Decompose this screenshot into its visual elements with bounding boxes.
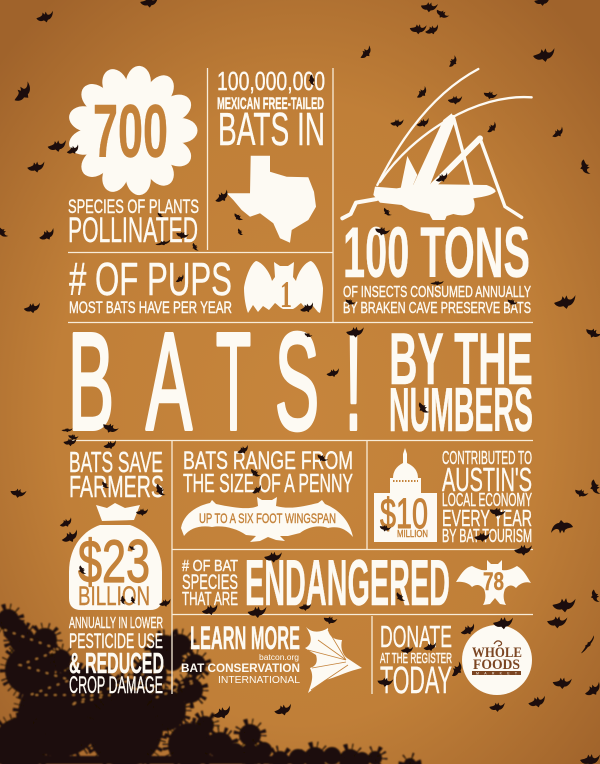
text: by bat tourism: BY BAT TOURISM — [442, 526, 532, 546]
icon: flower with 700 — [66, 64, 198, 197]
panel: endangered species — [182, 546, 531, 619]
icon: wide bat with wingspan label — [181, 497, 353, 542]
text: pesticide use: PESTICIDE USE — [69, 630, 163, 653]
panel: plants pollinated — [66, 64, 199, 250]
icon: money bag with $23 billion: BILLION — [78, 581, 150, 611]
icon: Whole Foods Market logo: WHOLE — [472, 645, 522, 661]
icon: bat with 78 — [456, 560, 531, 605]
icon: money bag with $23 billion — [69, 503, 162, 611]
title: Bats! by the numbers: ! — [345, 305, 362, 459]
text: # of bat: # OF BAT — [182, 558, 238, 575]
text: bats save: BATS SAVE — [69, 447, 163, 479]
panel: number of pups — [69, 253, 323, 317]
icon: Whole Foods Market logo — [462, 625, 532, 695]
text: species: SPECIES — [182, 571, 238, 594]
panel: bats in Texas — [217, 66, 325, 243]
icon: Whole Foods Market logo: FOODS — [473, 657, 520, 673]
text: crop damage: CROP DAMAGE — [69, 672, 163, 699]
icon: bat with 78: 78 — [483, 568, 504, 596]
text: # of pups: # OF PUPS — [69, 253, 232, 305]
heading: Bats! — [68, 305, 362, 459]
icon: capitol with $10 million: MILLION — [397, 529, 428, 540]
icon: capitol with $10 million — [374, 448, 437, 542]
text: batcon.org: batcon.org — [259, 653, 299, 662]
text: annually in lower: ANNUALLY IN LOWER — [69, 615, 163, 632]
icon: bat with 1: 1 — [280, 274, 292, 316]
text: the size of a penny: THE SIZE OF A PENNY — [183, 468, 353, 498]
heading: Bats!: S — [275, 305, 319, 459]
icon: Texas map — [227, 156, 316, 243]
text: that are: THAT ARE — [182, 589, 238, 609]
text: farmers: FARMERS — [69, 469, 164, 504]
icon: Whole Foods Market logo: MARKET — [476, 672, 518, 676]
panel: Austin economy — [374, 448, 532, 546]
text: Austin's: AUSTIN'S — [442, 461, 532, 498]
heading: Bats!: T — [216, 305, 251, 459]
text: at the register: AT THE REGISTER — [380, 650, 452, 667]
icon: capitol with $10 million: $10 — [380, 490, 428, 538]
icon: flower with 700: 700 — [93, 89, 168, 173]
icon: bat wing logo — [305, 627, 362, 693]
text: species of plants: SPECIES OF PLANTS — [68, 197, 199, 218]
text: bats range from: BATS RANGE FROM — [183, 447, 353, 475]
divider lines — [68, 68, 533, 694]
text: learn more: LEARN MORE — [190, 620, 300, 656]
heading: Bats!: B — [68, 305, 114, 459]
icon: wide bat with wingspan label: UP TO A SIX FOOT WINGSPAN — [199, 510, 336, 526]
text: bats in: BATS IN — [218, 103, 325, 155]
icon: grasshopper — [342, 69, 532, 220]
text: Mexican free-tailed: MEXICAN FREE-TAILED — [217, 94, 324, 113]
text: Bat Conservation: BAT CONSERVATION — [181, 663, 300, 675]
text: International: INTERNATIONAL — [218, 675, 300, 686]
tree silhouette — [0, 609, 416, 764]
text: every year: EVERY YEAR — [442, 505, 532, 531]
text: local economy: LOCAL ECONOMY — [442, 490, 532, 510]
panel: learn more — [181, 620, 362, 693]
text: pollinated: POLLINATED — [68, 211, 198, 250]
text: and reduced: & REDUCED — [69, 648, 164, 680]
panel: donate — [380, 619, 532, 702]
icon: money bag with $23 billion: $23 — [78, 528, 150, 595]
text: contributed to: CONTRIBUTED TO — [442, 448, 532, 468]
text: most bats have per year: MOST BATS HAVE PER YEAR — [69, 298, 232, 317]
panel: bat size range — [181, 447, 353, 542]
text: 100,000,000: 100,000,000 — [217, 66, 325, 96]
icon: bat with 1 — [244, 261, 323, 316]
panel: 100 tons of insects — [342, 69, 532, 317]
title: Bats! by the numbers — [68, 305, 533, 459]
text: today: TODAY — [380, 660, 452, 702]
heading: Bats!: A — [146, 305, 192, 459]
panel: bats save farmers — [69, 447, 164, 699]
text: donate: DONATE — [380, 619, 452, 654]
